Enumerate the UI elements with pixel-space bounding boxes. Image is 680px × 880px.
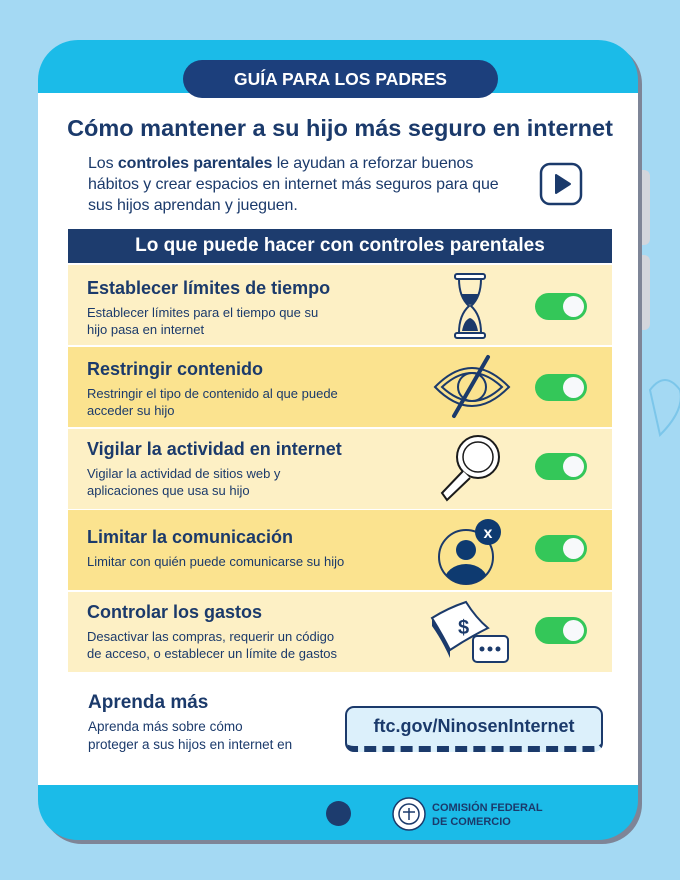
intro text: sus hijos aprendan y jueguen.	[88, 197, 298, 214]
row: limit communication: Limitar la comunicación	[87, 527, 293, 547]
section header bar: Lo que puede hacer con controles parentales	[135, 235, 545, 256]
row: restrict content: acceder su hijo	[87, 403, 174, 418]
icon: hourglass	[454, 273, 486, 339]
icon: money and code	[430, 600, 509, 663]
section header bar	[68, 229, 612, 263]
row: limit communication: Limitar con quién puede comunicarse su hijo	[87, 554, 344, 569]
icon: play button	[540, 162, 582, 206]
row: control spending	[68, 592, 612, 672]
icon: person with x	[438, 519, 501, 585]
learn more heading: Aprenda más	[88, 692, 208, 713]
row: control spending: de acceso, o establecer un límite de gastos	[87, 646, 337, 661]
intro text	[88, 155, 499, 214]
FTC logo: DE COMERCIO	[432, 816, 511, 828]
url box: ftc.gov/NinosenInternet	[373, 716, 574, 736]
icon: person with x: x	[484, 525, 493, 542]
row: time limits: Establecer límites para el tiempo que su	[87, 305, 318, 320]
row: limit communication	[68, 510, 612, 590]
FTC logo: COMISIÓN FEDERAL	[432, 802, 543, 814]
row: monitor activity: aplicaciones que usa su hijo	[87, 483, 250, 498]
row: restrict content: Restringir el tipo de contenido al que puede	[87, 386, 338, 401]
intro text: hábitos y crear espacios en internet más seguros para que	[88, 176, 499, 193]
url box	[345, 706, 603, 752]
row: monitor activity	[68, 429, 612, 509]
row: time limits: hijo pasa en internet	[87, 322, 204, 337]
row: monitor activity: Vigilar la actividad de sitios web y	[87, 466, 280, 481]
row: time limits: Establecer límites de tiempo	[87, 278, 330, 298]
row: monitor activity: Vigilar la actividad en internet	[87, 439, 342, 459]
learn more text: Aprenda más sobre cómo	[88, 719, 243, 734]
side buttons	[636, 170, 650, 245]
icon: money and code: $	[458, 617, 469, 639]
learn more text	[88, 719, 292, 752]
row: restrict content: Restringir contenido	[87, 359, 263, 379]
icon: magnifying glass	[440, 435, 500, 502]
intro text: Los controles parentales le ayudan a reforzar buenos	[88, 155, 473, 172]
header pill: GUÍA PARA LOS PADRES	[234, 69, 447, 89]
row: restrict content	[68, 347, 612, 427]
row: control spending: Controlar los gastos	[87, 602, 262, 622]
icon: crossed eye	[434, 354, 510, 418]
header pill	[183, 60, 498, 98]
decorative background hearts	[649, 379, 680, 437]
title: Cómo mantener a su hijo más seguro en internet	[67, 115, 613, 141]
row: time limits	[68, 265, 612, 345]
FTC logo	[392, 797, 543, 831]
row: control spending: Desactivar las compras, requerir un código	[87, 629, 334, 644]
home button dot	[326, 801, 351, 826]
learn more text: proteger a sus hijos en internet en	[88, 737, 292, 752]
